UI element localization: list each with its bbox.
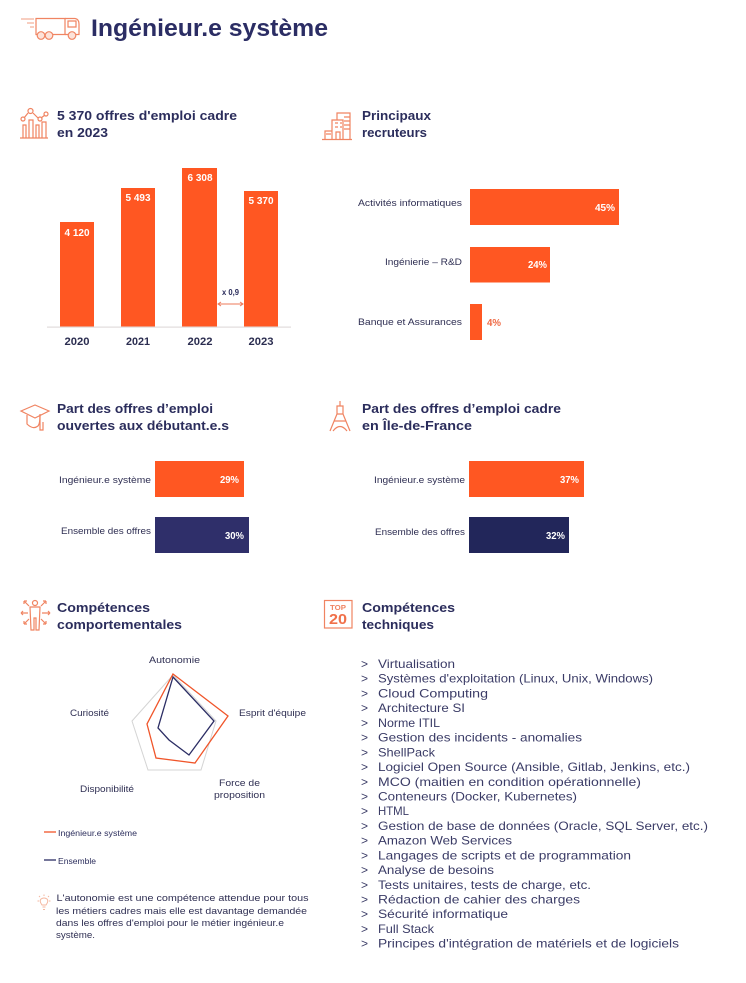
skills list: > (361, 775, 368, 789)
skills list: Langages de scripts et de programmation (378, 848, 631, 862)
icon: graduation cap (21, 405, 49, 430)
panel: Île-de-France share (330, 401, 584, 553)
icon: truck (21, 18, 79, 39)
skills list: Gestion de base de données (Oracle, SQL Server, etc.) (378, 819, 708, 833)
skills list: Norme ITIL (378, 716, 440, 730)
arrow: x 0,9 variation (218, 287, 243, 306)
panel: soft skills (21, 600, 309, 941)
skills list: > (361, 716, 368, 730)
skills list: Virtualisation (378, 657, 455, 671)
panel: technical skills (324, 600, 708, 951)
skills list: Logiciel Open Source (Ansible, Gitlab, Jenkins, etc.) (378, 760, 690, 774)
skills list: Architecture SI (378, 701, 465, 715)
radar chart: proposition (214, 790, 265, 801)
bar chart: entry-level: 30% (225, 530, 245, 542)
skills list: > (361, 745, 368, 759)
skills list: Amazon Web Services (378, 834, 512, 848)
skills list: > (361, 863, 368, 877)
bar chart: entry-level (59, 461, 249, 553)
skills list: Principes d'intégration de matériels et de logiciels (378, 937, 679, 951)
bar chart: offers per year: 4 120 (64, 227, 90, 239)
skills list: > (361, 848, 368, 862)
bar chart: Île-de-France: 37% (560, 474, 580, 486)
skills list: > (361, 657, 368, 671)
skills list: > (361, 907, 368, 921)
skills list: > (361, 819, 368, 833)
skills list: > (361, 672, 368, 686)
arrow: x 0,9 variation: x 0,9 (222, 287, 239, 297)
skills list: > (361, 731, 368, 745)
skills list: Tests unitaires, tests de charge, etc. (378, 878, 591, 892)
heading: Part des offres d’emploi cadre (362, 401, 561, 416)
panel: entry-level share (21, 401, 249, 553)
panel: job offers (20, 108, 291, 348)
skills list: HTML (378, 804, 409, 818)
bar chart: recruiters: Ingénierie – R&D (385, 257, 462, 268)
heading: en Île-de-France (362, 418, 472, 433)
heading: ouvertes aux débutant.e.s (57, 418, 229, 433)
bar chart: offers per year: 6 308 (188, 172, 213, 184)
bar chart: recruiters: 4% (487, 317, 502, 329)
note text: dans les offres d'emploi pour le métier ingénieur.e (56, 918, 284, 929)
bar chart: recruiters: 45% (595, 202, 616, 214)
bar chart: Île-de-France: Ingénieur.e système (374, 475, 465, 486)
skills list: Cloud Computing (378, 686, 488, 700)
heading (57, 108, 237, 140)
skills list: Conteneurs (Docker, Kubernetes) (378, 790, 577, 804)
skills list: > (361, 878, 368, 892)
bar chart: entry-level: Ensemble des offres (61, 526, 151, 537)
header (21, 15, 328, 42)
heading (362, 108, 432, 140)
legend: Ingénieur.e système (58, 829, 138, 838)
note text (56, 893, 309, 941)
note text: L'autonomie est une compétence attendue pour tous (56, 893, 309, 904)
heading: en 2023 (57, 125, 108, 140)
skills list: Rédaction de cahier des charges (378, 892, 580, 906)
skills list: Gestion des incidents - anomalies (378, 731, 582, 745)
bar chart: offers per year: 5 493 (126, 192, 151, 204)
bar chart: offers per year: 2021 (126, 336, 150, 348)
skills list: Systèmes d'exploitation (Linux, Unix, Windows) (378, 672, 653, 686)
icon: top 20 (324, 600, 352, 628)
heading (57, 600, 182, 632)
heading: Compétences (57, 600, 150, 615)
radar chart: Disponibilité (80, 784, 134, 795)
bar chart: Île-de-France: Ensemble des offres (375, 527, 465, 538)
skills list: > (361, 701, 368, 715)
heading: Compétences (362, 600, 455, 615)
bar chart: recruiters: Activités informatiques (358, 198, 462, 209)
bar chart: offers per year: 2023 (248, 336, 274, 348)
heading: 5 370 offres d'emploi cadre (57, 108, 237, 123)
heading: Part des offres d’emploi (57, 401, 213, 416)
skills list: > (361, 804, 368, 818)
bar chart: Île-de-France (374, 461, 584, 553)
icon: Eiffel tower (330, 401, 350, 431)
icon: top 20: 20 (329, 611, 347, 628)
bar chart: entry-level: Ingénieur.e système (59, 475, 151, 486)
bar chart: offers per year: 5 370 (248, 195, 274, 207)
note text: les métiers cadres mais elle est davantage demandée (56, 906, 307, 917)
bar chart: offers per year: 2022 (188, 336, 212, 348)
heading: techniques (362, 617, 434, 632)
skills list: Full Stack (378, 922, 435, 936)
skills list: Sécurité informatique (378, 907, 508, 921)
skills list (361, 657, 708, 951)
bar chart: entry-level: 29% (220, 474, 240, 486)
skills list: > (361, 834, 368, 848)
skills list: > (361, 937, 368, 951)
skills list: > (361, 760, 368, 774)
bar chart: recruiters: 24% (528, 259, 548, 271)
heading (362, 401, 561, 433)
legend: Ensemble (58, 857, 97, 866)
skills list: Analyse de besoins (378, 863, 494, 877)
skills list: > (361, 922, 368, 936)
heading: recruteurs (362, 125, 427, 140)
legend (44, 829, 138, 866)
icon: person with arrows (21, 600, 50, 630)
note text: système. (56, 930, 95, 941)
bar chart: recruiters: Banque et Assurances (358, 317, 462, 328)
heading: Principaux (362, 108, 432, 123)
heading (57, 401, 229, 433)
skills list: > (361, 892, 368, 906)
radar chart (70, 655, 306, 801)
panel: main recruiters (322, 108, 619, 340)
icon: chart with people (20, 108, 48, 138)
radar chart: Force de (219, 778, 260, 789)
radar chart: Esprit d'équipe (239, 708, 306, 719)
title: Ingénieur.e système (91, 15, 328, 42)
skills list: ShellPack (378, 745, 436, 759)
skills list: MCO (maitien en condition opérationnelle) (378, 775, 641, 789)
bar chart: offers per year (47, 168, 291, 348)
radar chart: Curiosité (70, 708, 109, 719)
bar chart: recruiters (358, 189, 619, 340)
bar chart: Île-de-France: 32% (546, 530, 566, 542)
bar chart: offers per year: 2020 (64, 336, 90, 348)
skills list: > (361, 686, 368, 700)
icon: buildings (322, 113, 352, 140)
skills list: > (361, 790, 368, 804)
radar chart: Autonomie (149, 655, 200, 666)
heading: comportementales (57, 617, 182, 632)
icon: light bulb (38, 894, 50, 910)
icon: top 20: TOP (330, 605, 346, 612)
heading (362, 600, 455, 632)
